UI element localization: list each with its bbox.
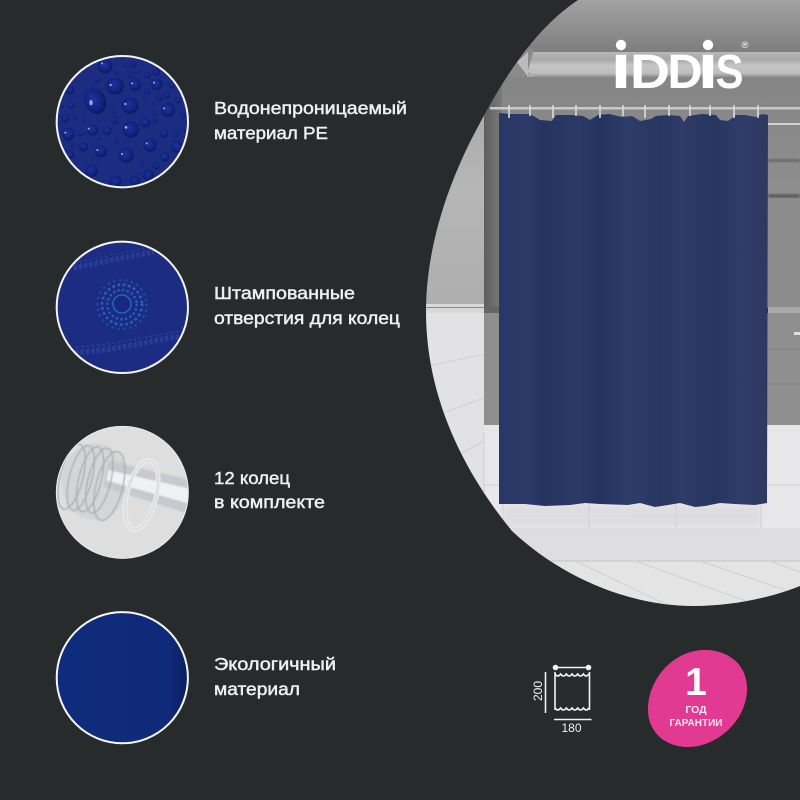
registered mark: ® [742, 40, 748, 51]
feature 2: stamped holes [56, 241, 400, 373]
inner recess [484, 313, 800, 425]
caption: материал [214, 679, 300, 699]
left side wall [426, 116, 484, 307]
caption [214, 468, 325, 512]
lower left tile wall [426, 313, 484, 493]
bath ledge [484, 425, 800, 432]
feature 1: waterproof material [56, 56, 407, 188]
rod ends [553, 665, 591, 670]
white dado rail [426, 304, 800, 313]
highlights [64, 62, 165, 155]
wall fixture [794, 332, 800, 335]
logo letters: I [611, 46, 631, 99]
warranty badge [648, 650, 747, 747]
caption [214, 654, 336, 699]
right recess bands [768, 159, 800, 308]
warranty text: ГОД [685, 704, 707, 716]
photo: stamped eyelet [56, 241, 188, 373]
logo letters: D [630, 46, 670, 99]
size icon: 180 x 200 [531, 665, 592, 735]
ceiling [522, 0, 800, 55]
curtain shadow on tiles [502, 507, 759, 526]
logo letters: D [668, 46, 702, 99]
curtain pictogram [546, 668, 592, 720]
upper wall [500, 76, 800, 308]
logo letters: I [698, 46, 718, 99]
logo: IDDIS [611, 40, 748, 99]
feature 4: eco material [57, 612, 336, 743]
number: 1 [685, 661, 707, 704]
floor [550, 561, 800, 606]
swatch: blue fabric [57, 612, 188, 743]
caption: в комплекте [214, 492, 325, 512]
curtain rings [509, 105, 758, 118]
warranty text [670, 704, 722, 729]
bathroom photo with shower curtain [420, 0, 800, 611]
pink blob [648, 650, 747, 747]
photo: water drops [56, 56, 188, 188]
curtain [499, 113, 768, 507]
crown molding [480, 48, 800, 120]
logo i dots [616, 40, 713, 50]
height label: 200 [531, 681, 545, 701]
shower rod [490, 107, 800, 125]
caption: 12 колец [214, 468, 290, 488]
caption [214, 283, 400, 328]
logo letters: S [716, 46, 744, 99]
width label: 180 [561, 721, 582, 735]
warranty text: ГАРАНТИИ [670, 717, 722, 729]
tile joints [429, 349, 800, 606]
caption: Штампованные [214, 283, 355, 303]
caption: отверстия для колец [214, 308, 400, 328]
caption: материал РЕ [214, 123, 328, 143]
caption: Экологичный [214, 654, 336, 674]
bath panel tiles [484, 432, 800, 528]
photo: rings on rod [53, 426, 188, 558]
logo letters [611, 46, 744, 99]
left recess shadow [484, 76, 502, 308]
skirting [510, 528, 800, 561]
caption: Водонепроницаемый [214, 98, 407, 118]
caption [214, 98, 407, 143]
feature 3: twelve rings [53, 426, 325, 558]
